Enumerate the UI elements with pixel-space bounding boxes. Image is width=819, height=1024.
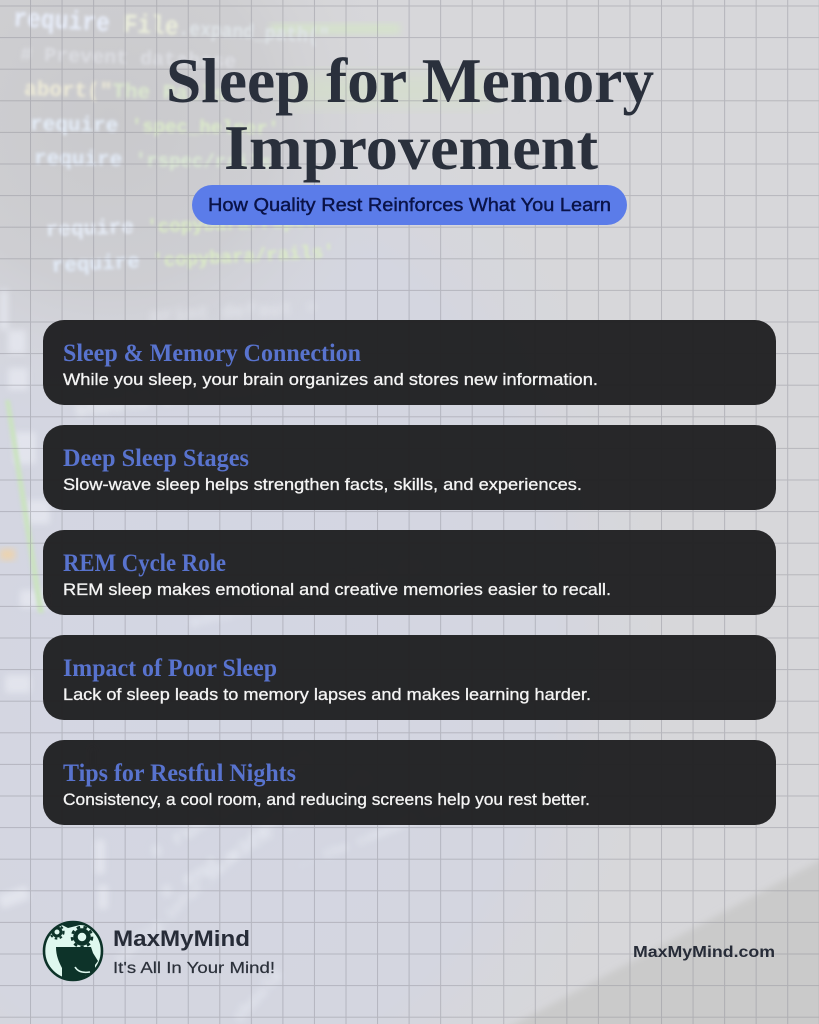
panel: tips for restful nights [43,740,776,825]
panel: deep sleep stages: Deep Sleep Stages [63,445,249,472]
brand name and tagline: It's All In Your Mind! [113,960,275,977]
background: blurred code screen: require 'copybara/rspec' [45,210,329,243]
title: Improvement [224,112,599,183]
subtitle pill: How Quality Rest Reinforces What You Learn [208,195,611,215]
title [166,45,654,183]
panel: REM cycle role [43,530,776,615]
panel: impact of poor sleep: Impact of Poor Sleep [63,655,277,682]
background: blurred code screen: require 'rspec/rails' [34,148,283,175]
panel: sleep and memory connection: While you sleep, your brain organizes and stores new information. [63,371,598,389]
subtitle pill [192,185,627,225]
background: blurred code screen: -- the command line [296,795,460,875]
background: blurred code screen: abort("The Rails [24,79,226,107]
background: blurred code screen: # run twice. it [147,746,319,866]
panel: deep sleep stages [43,425,776,510]
icon: MaxMyMind logo, head with gears [44,921,102,982]
brand name and tagline: MaxMyMind [113,926,250,951]
panel: REM cycle role: REM Cycle Role [63,550,226,577]
title: Sleep for Memory [166,45,654,116]
panel: tips for restful nights: Consistency, a cool room, and reducing screens help you rest better. [63,791,590,809]
background: blurred code screen: config.infer_base_class [111,808,287,969]
panel: impact of poor sleep [43,635,776,720]
background: blurred code screen: require 'copybara/rails' [51,241,335,279]
website url: MaxMyMind.com [633,944,775,961]
background: blurred code screen: additional_options do [186,555,424,634]
panel: sleep and memory connection: Sleep & Memory Connection [63,340,361,367]
panel: REM cycle role: REM sleep makes emotional and creative memories easier to recall. [63,581,611,599]
panel: deep sleep stages: Slow-wave sleep helps strengthen facts, skills, and experiences. [63,476,582,494]
background: blurred code screen: # end with _spec.rb [157,766,376,906]
panel: impact of poor sleep: Lack of sleep leads to memory lapses and makes learning harder. [63,686,591,704]
background: blurred code screen: require File.expand_path(" [13,5,330,51]
background: blurred code screen: should be_valid [73,375,263,424]
brand name and tagline [113,926,275,977]
background: blurred code screen: print defaut = [149,297,318,329]
background: blurred code screen: require 'spec_helper' [30,114,279,141]
panel: sleep and memory connection [43,320,776,405]
panel: tips for restful nights: Tips for Restful Nights [63,760,296,787]
background: blurred code screen: # Prevent database [20,44,236,75]
